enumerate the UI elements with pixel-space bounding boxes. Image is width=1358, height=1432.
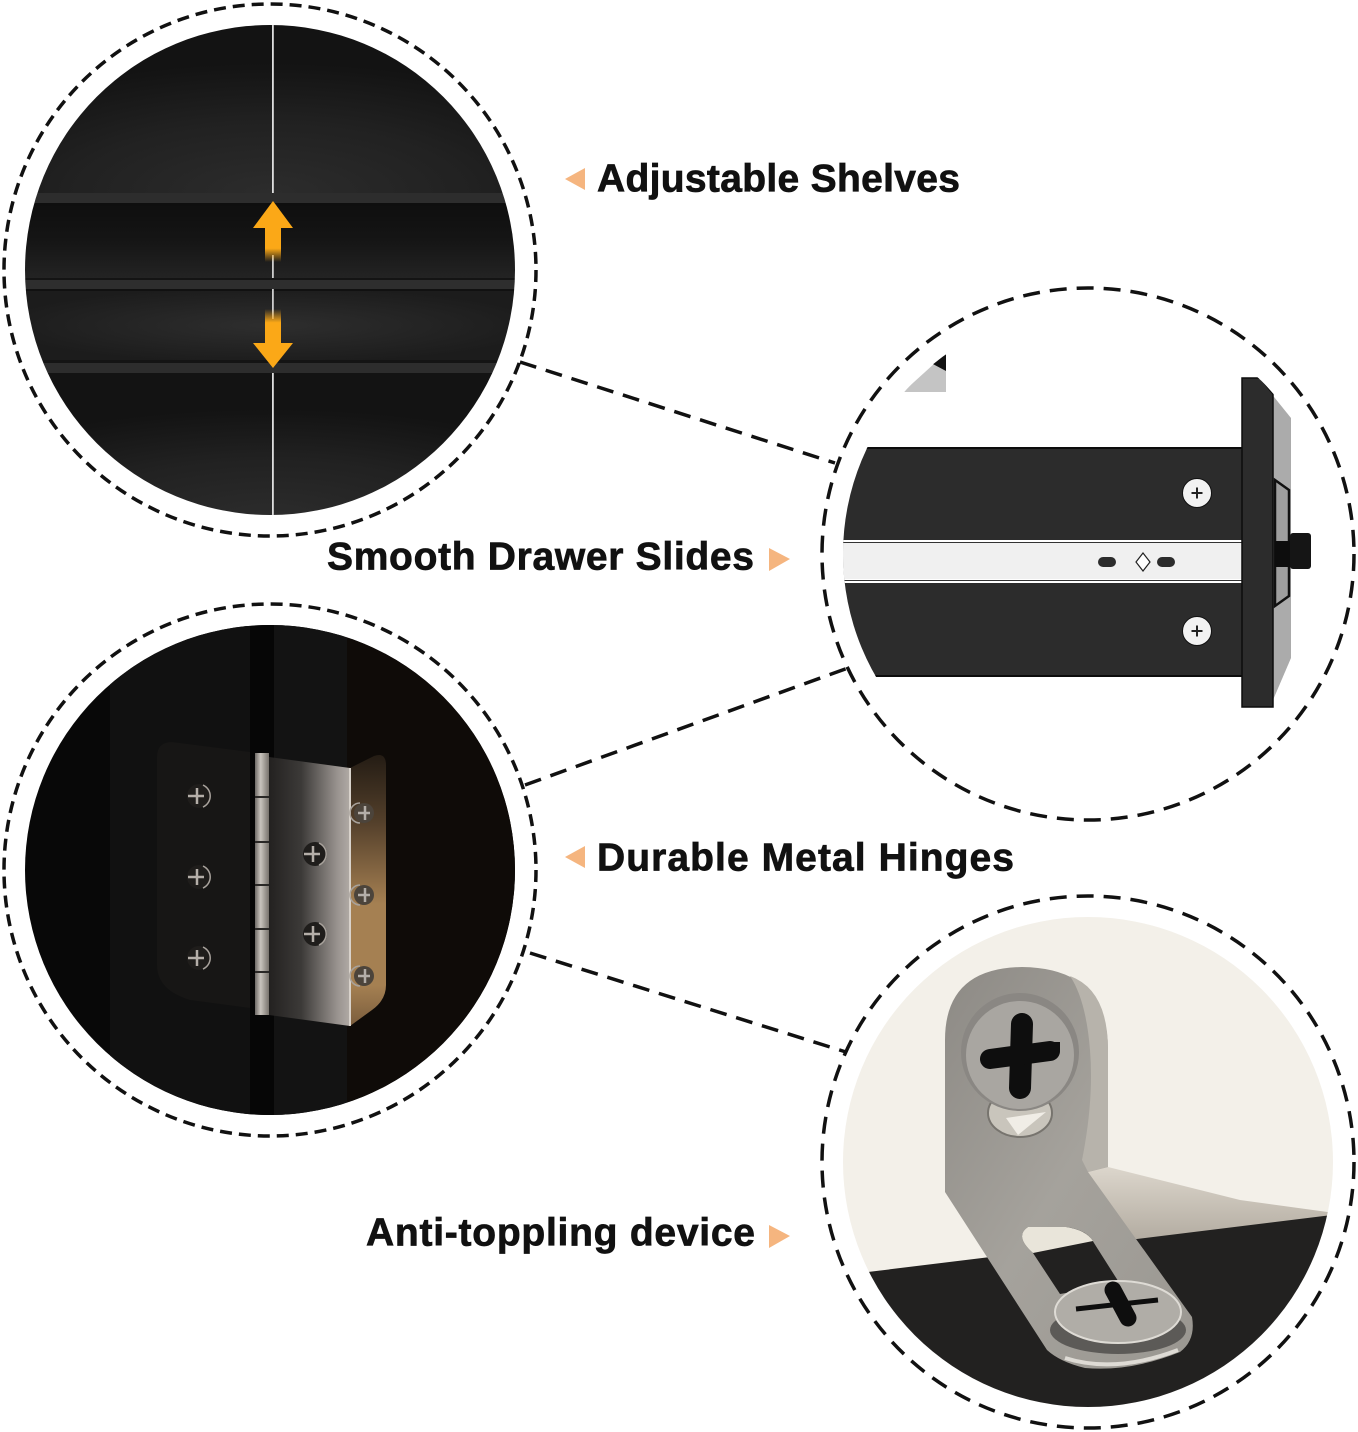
lower slot	[1022, 1227, 1120, 1294]
panel: smooth drawer slides	[822, 288, 1354, 820]
floor surface	[869, 1216, 1327, 1407]
icon: up arrow	[253, 201, 293, 262]
bracket lower highlight	[1065, 1350, 1178, 1364]
front plate side	[1274, 396, 1291, 698]
front plate	[1242, 378, 1273, 707]
hinge right leaf	[269, 757, 350, 1026]
panel: adjustable shelves	[4, 4, 536, 536]
label: anti-toppling device: Anti-toppling device	[366, 1212, 755, 1254]
panel: anti-toppling device	[822, 896, 1354, 1430]
label: smooth drawer slides: Smooth Drawer Slides	[327, 536, 754, 578]
hinge left leaf	[157, 742, 250, 1008]
connector: shelves to drawer slides	[520, 362, 835, 463]
slide rail	[830, 540, 1242, 583]
connector: hinges to drawer slides	[525, 668, 848, 785]
screw top	[1182, 478, 1212, 508]
bracket body	[945, 967, 1193, 1369]
top hole	[987, 1102, 1053, 1138]
drawer corner fragment	[903, 353, 946, 392]
rail slots	[1098, 557, 1116, 567]
hinge pin	[255, 753, 269, 1015]
label: durable metal hinges: Durable Metal Hinges	[597, 836, 1014, 880]
panel: durable metal hinges	[0, 600, 540, 1140]
hinge screws	[303, 803, 374, 986]
connector: hinges to anti-toppling device	[530, 953, 846, 1052]
label: adjustable shelves: Adjustable Shelves	[597, 158, 960, 200]
top screw head	[961, 993, 1079, 1111]
hinge return flange	[350, 755, 386, 1026]
bottom screw head	[1050, 1281, 1186, 1354]
knob	[1275, 533, 1311, 569]
bracket shadow on wall	[1080, 1167, 1335, 1240]
drawer side panel	[830, 447, 1242, 677]
bracket upper lighter edge	[1070, 976, 1108, 1172]
icon: down arrow	[253, 309, 293, 368]
screw bottom	[1182, 616, 1212, 646]
